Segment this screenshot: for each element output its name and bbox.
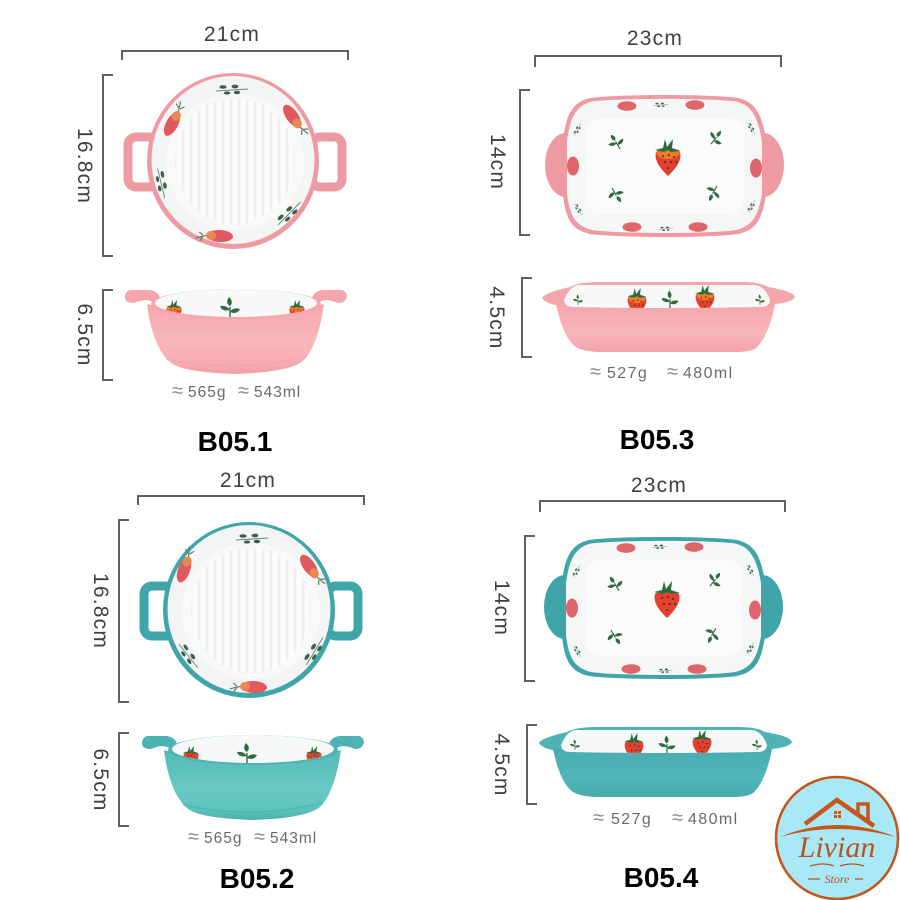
panel: B05.2 teal round dish (89, 469, 364, 894)
logo: Livian Store (776, 777, 898, 899)
weight and volume: ≈ (593, 807, 604, 829)
height dimension 14cm (486, 90, 530, 235)
depth dimension 4.5cm: 4.5cm (490, 733, 513, 797)
dish top view (144, 522, 358, 698)
product code: B05.1 (198, 426, 272, 457)
weight and volume: ≈ (672, 807, 683, 829)
weight and volume: ≈ (188, 826, 199, 848)
weight and volume: ≈ (172, 380, 183, 402)
height dimension 16.8cm (89, 520, 129, 702)
width dimension 21cm: 21cm (220, 469, 276, 492)
weight and volume: 527g (611, 811, 652, 828)
depth dimension 6.5cm: 6.5cm (73, 303, 96, 367)
weight and volume: 480ml (683, 365, 734, 382)
panel: B05.4 teal rectangular dish (490, 474, 792, 893)
weight and volume: 565g (188, 384, 226, 401)
depth dimension 6.5cm (73, 290, 113, 380)
product code: B05.4 (624, 862, 699, 893)
depth dimension 4.5cm: 4.5cm (485, 286, 508, 350)
weight and volume: 543ml (270, 830, 317, 847)
width dimension 21cm (138, 469, 364, 505)
weight and volume (188, 826, 317, 848)
dish side view (539, 727, 792, 797)
weight and volume (593, 807, 739, 829)
panel: B05.3 pink rectangular dish (485, 27, 795, 455)
store tagline: Store (825, 872, 850, 886)
width dimension 21cm: 21cm (204, 23, 260, 46)
dish top view (544, 537, 783, 679)
dish side view (125, 289, 347, 374)
weight and volume: ≈ (238, 380, 249, 402)
weight and volume (590, 361, 734, 383)
ornament (810, 864, 864, 866)
weight and volume: 480ml (688, 811, 739, 828)
weight and volume: 565g (204, 830, 242, 847)
height dimension 16.8cm (73, 75, 113, 256)
brand name: Livian (798, 831, 875, 864)
dish side view (142, 735, 364, 820)
weight and volume (172, 380, 301, 402)
product code: B05.2 (220, 863, 294, 894)
width dimension 23cm (535, 27, 781, 67)
weight and volume: ≈ (254, 826, 265, 848)
height dimension 14cm: 14cm (486, 134, 509, 190)
icon: house roof (780, 800, 896, 837)
width dimension 21cm (122, 23, 348, 60)
height dimension 14cm (490, 536, 535, 681)
depth dimension 6.5cm: 6.5cm (89, 748, 112, 812)
width dimension 23cm: 23cm (631, 474, 687, 497)
panel: B05.1 pink round dish (73, 23, 348, 457)
depth dimension 4.5cm (485, 278, 532, 357)
weight and volume: 543ml (254, 384, 301, 401)
width dimension 23cm (540, 474, 785, 512)
dish side view (542, 282, 795, 352)
product code: B05.3 (620, 424, 694, 455)
height dimension 16.8cm: 16.8cm (89, 573, 112, 649)
weight and volume: ≈ (667, 361, 678, 383)
width dimension 23cm: 23cm (627, 27, 683, 50)
weight and volume: 527g (607, 365, 648, 382)
dish top view (128, 73, 342, 249)
weight and volume: ≈ (590, 361, 601, 383)
depth dimension 6.5cm (89, 733, 129, 826)
height dimension 14cm: 14cm (490, 580, 513, 636)
height dimension 16.8cm: 16.8cm (73, 128, 96, 204)
depth dimension 4.5cm (490, 725, 537, 804)
dish top view (545, 95, 784, 237)
